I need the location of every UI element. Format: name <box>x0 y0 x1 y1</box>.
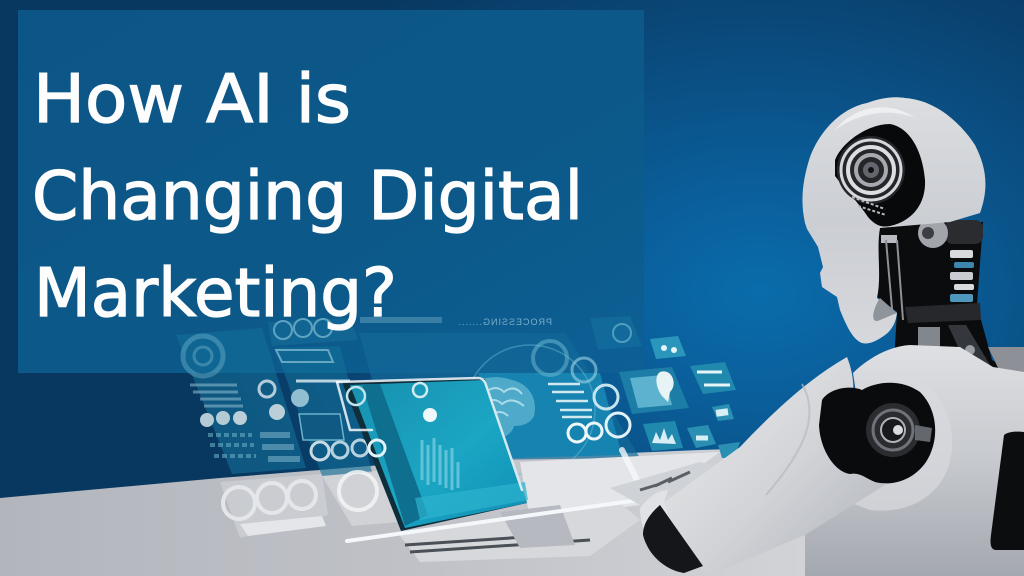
title text <box>32 60 583 332</box>
table highlight near keyboard <box>520 452 720 520</box>
title text: Changing Digital <box>32 157 583 235</box>
robot back panel <box>991 432 1024 550</box>
title panel <box>18 10 644 373</box>
holographic panel: middle left column <box>275 346 372 476</box>
table surface <box>0 440 1024 576</box>
robot shoulder joint <box>819 383 935 483</box>
title text: How AI is <box>33 60 351 138</box>
brain graphic <box>460 377 535 439</box>
holographic panel: central brain screen <box>359 333 640 475</box>
small holographic panels: right side <box>590 316 740 458</box>
robot torso <box>805 345 1024 576</box>
glass screen frame lines <box>337 378 646 541</box>
robot wrist cuff and hand <box>640 490 703 573</box>
robot head <box>802 97 985 343</box>
robot ear socket <box>835 124 925 227</box>
table reflections <box>220 470 398 538</box>
robot upper arm <box>663 357 885 576</box>
robot neck <box>876 218 1012 372</box>
keyboard and robot fingers <box>610 462 730 505</box>
holographic panel: top gauge strip <box>268 318 442 346</box>
holographic label: processing: PROCESSING....... <box>457 317 552 327</box>
rear shoulder block <box>988 347 1024 372</box>
robot <box>640 97 1024 576</box>
laptop <box>342 379 640 562</box>
laptop base <box>397 503 640 562</box>
laptop screen <box>342 379 527 531</box>
neck ball joint <box>945 220 983 244</box>
title text: Marketing? <box>34 254 397 332</box>
holographic panel: far left dashboard <box>176 328 306 474</box>
